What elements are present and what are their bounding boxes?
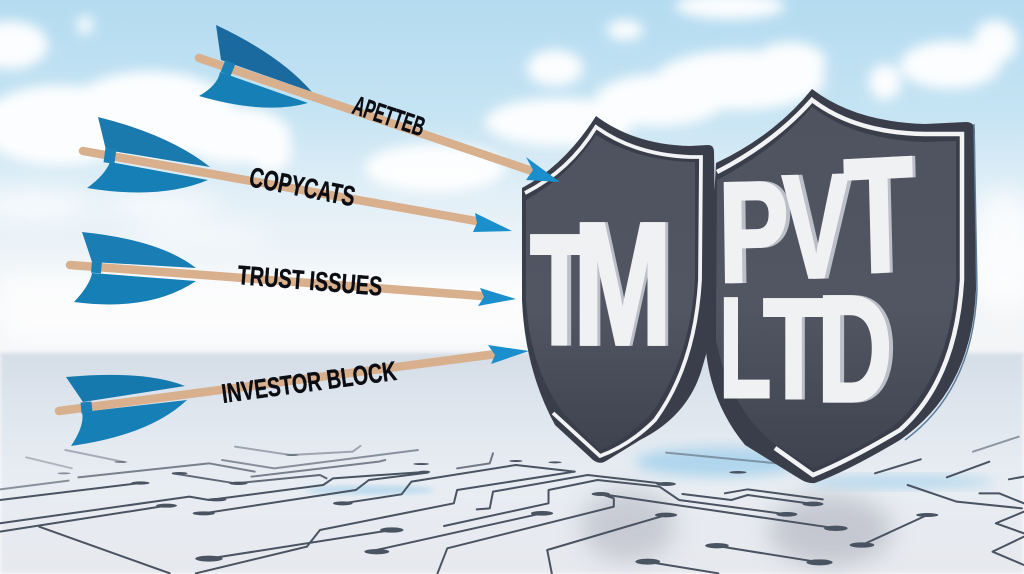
shaft [83, 151, 476, 221]
shield: PVT LTD [706, 89, 977, 483]
shield body [706, 89, 976, 483]
arrow head [526, 157, 560, 182]
band [86, 402, 87, 413]
text: LTD: D [821, 264, 896, 434]
label: INVESTOR BLOCK [220, 356, 399, 409]
background: clouds [0, 0, 1024, 345]
text: LTD [719, 264, 896, 434]
fletching [216, 25, 312, 92]
circuit board traces [0, 437, 1024, 573]
shield inner face [716, 107, 956, 468]
text: LTD: L [719, 267, 771, 427]
text: TM: T [534, 201, 593, 378]
arrow head [473, 213, 512, 232]
text: PVT: V [785, 143, 854, 310]
fletching [66, 375, 185, 402]
label: APETTEB [349, 90, 429, 142]
text: TM [530, 186, 675, 381]
text: TM: T [530, 201, 589, 378]
band [109, 148, 111, 163]
shaft [70, 265, 482, 296]
band [223, 66, 233, 70]
fletching [98, 117, 210, 167]
shield inner face [526, 135, 695, 450]
shield blue edge [905, 124, 977, 440]
arrow: TRUST ISSUES [70, 232, 516, 306]
text: LTD: T [766, 269, 827, 429]
text: PVT: P [721, 151, 794, 313]
arrow: COPYCATS [83, 117, 512, 232]
shield white trim [717, 100, 962, 475]
text: PVT: V [781, 143, 850, 310]
shaft [59, 354, 496, 411]
shield white trim [525, 127, 701, 456]
label: TRUST ISSUES [237, 260, 383, 302]
fletching [82, 232, 196, 268]
background: floor [0, 353, 1024, 574]
shield: TM [522, 116, 716, 463]
text: PVT: T [842, 122, 916, 308]
text: LTD: T [763, 269, 824, 429]
arrow head [478, 288, 516, 306]
arrow: INVESTOR BLOCK [59, 345, 529, 446]
label: COPYCATS [247, 161, 358, 212]
text: PVT: T [845, 122, 919, 308]
text: PVT: P [717, 151, 790, 313]
shaft [199, 58, 532, 171]
arrow head [488, 345, 529, 364]
floor: blue glow and shield shadows [305, 447, 995, 566]
text: PVT [717, 122, 919, 313]
shield body [522, 116, 716, 463]
background: sky [0, 0, 1024, 356]
text: LTD: D [817, 264, 892, 434]
arrow: APETTEB [199, 25, 560, 182]
text: TM: M [573, 186, 672, 381]
band [96, 261, 97, 273]
text: TM: M [576, 186, 675, 381]
